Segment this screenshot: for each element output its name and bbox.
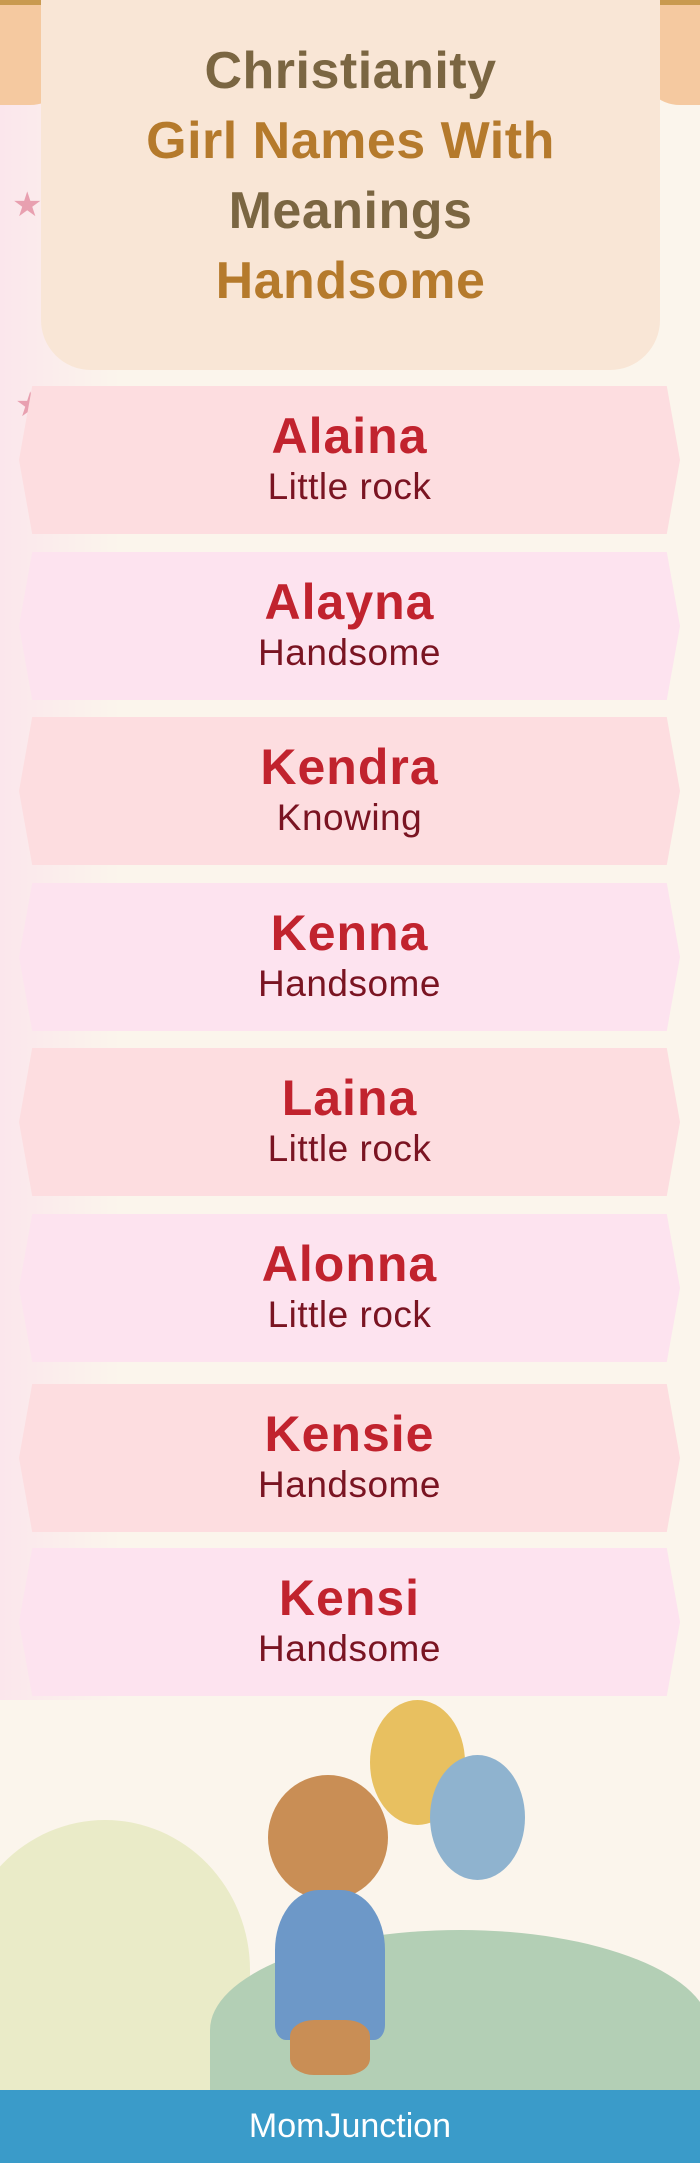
decorative corner: left — [0, 0, 70, 105]
row: Kenna: Kenna — [271, 905, 428, 961]
row: Alayna: Handsome — [258, 632, 441, 673]
row: Laina: Little rock — [268, 1128, 431, 1169]
title: Christianity — [204, 42, 497, 100]
icon: star: ★ — [15, 386, 45, 424]
row: Kensi: Kensi — [279, 1570, 420, 1626]
row: Laina — [19, 1048, 680, 1196]
footer logo — [0, 2090, 700, 2163]
row: Kensi — [19, 1548, 680, 1696]
row: Alaina: Alaina — [271, 408, 428, 464]
row: Kendra — [19, 717, 680, 865]
icon: star: ★ — [12, 186, 42, 224]
title: Handsome — [216, 252, 485, 310]
row: Kendra: Kendra — [260, 739, 439, 795]
decorative corner: right — [640, 0, 700, 105]
row: Kensie — [19, 1384, 680, 1532]
row: Alaina: Little rock — [268, 466, 431, 507]
row: Kensie: Kensie — [265, 1406, 434, 1462]
row: Kendra: Knowing — [277, 797, 422, 838]
row: Alayna — [19, 552, 680, 700]
row: Alonna: Alonna — [262, 1236, 437, 1292]
row: Kenna: Handsome — [258, 963, 441, 1004]
footer logo: MomJunction — [249, 2107, 451, 2145]
row: Alonna: Little rock — [268, 1294, 431, 1335]
title: Meanings — [229, 182, 472, 240]
row: Alayna: Alayna — [265, 574, 434, 630]
row: Alaina — [19, 386, 680, 534]
row: Kenna — [19, 883, 680, 1031]
illustration: hills and bear — [0, 1700, 700, 2090]
title — [41, 0, 660, 370]
row: Laina: Laina — [282, 1070, 417, 1126]
row: Alonna — [19, 1214, 680, 1362]
row: Kensi: Handsome — [258, 1628, 441, 1669]
row: Kensie: Handsome — [258, 1464, 441, 1505]
title: Girl Names With — [146, 112, 555, 170]
